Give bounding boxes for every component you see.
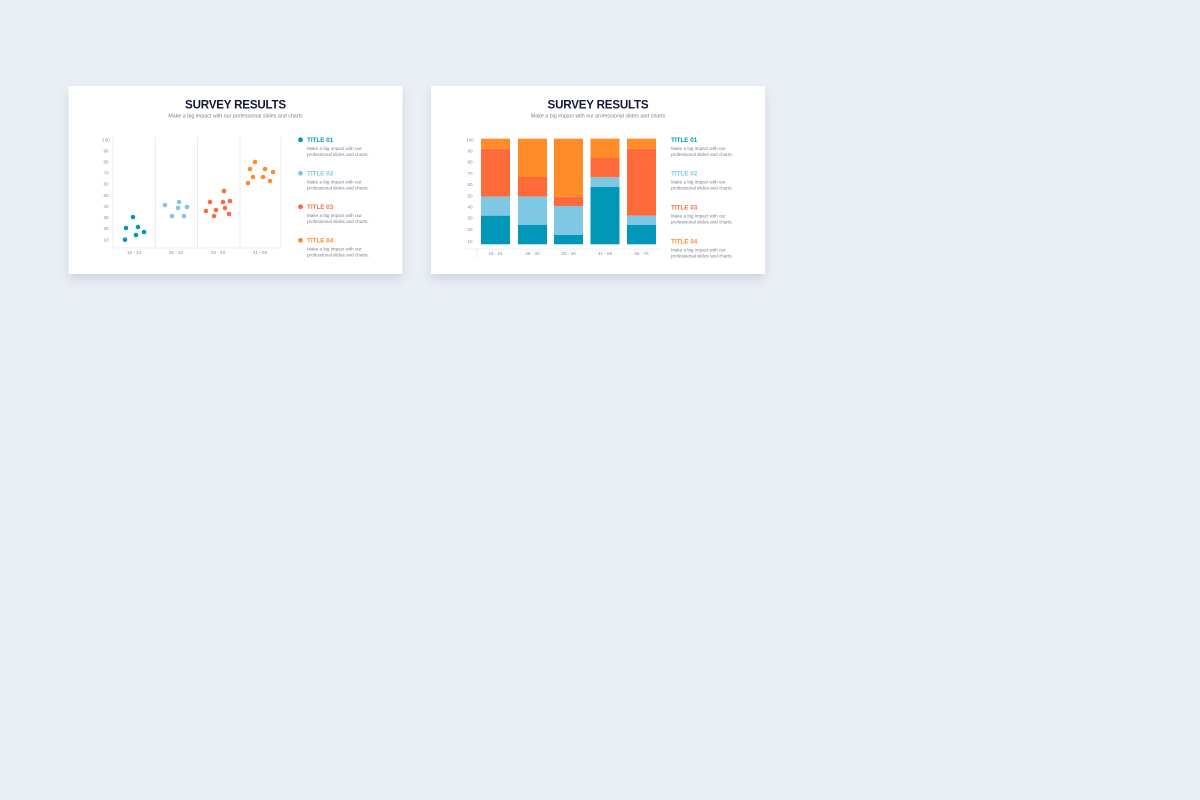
legend: scatter: Make a big impact with our (307, 213, 362, 218)
subtitle: Make a big impact with our professional slides and charts (531, 114, 665, 120)
legend: bars: TITLE 02 (671, 170, 698, 178)
legend: scatter: professional slides and charts. (307, 152, 369, 157)
scatter chart: 70 (103, 170, 109, 176)
legend: bars: TITLE 03 (671, 204, 698, 212)
stacked bar chart: 25 - 32 (525, 251, 540, 256)
legend: bars: Make a big impact with our (671, 214, 726, 218)
scatter chart: 90 (103, 148, 109, 154)
scatter chart: 40 (103, 204, 109, 209)
stacked bar chart: 90 (467, 148, 473, 154)
legend: scatter: TITLE 01 (307, 137, 334, 144)
panel: scatter card (68, 86, 402, 274)
scatter chart (102, 137, 281, 255)
legend: scatter: professional slides and charts. (307, 186, 369, 190)
legend: scatter: TITLE 03 (307, 204, 334, 211)
panel: stacked bar card (431, 86, 765, 274)
legend: bars: professional slides and charts. (671, 186, 733, 190)
title: SURVEY RESULTS (185, 98, 286, 112)
subtitle: Make a big impact with our professional slides and charts (168, 114, 303, 120)
stacked bar chart: 60 (467, 182, 473, 187)
stacked bar chart: 10 (467, 239, 473, 244)
scatter chart: 25 - 32 (169, 250, 184, 255)
legend: scatter: Make a big impact with our (307, 246, 362, 252)
scatter chart: 41 - 55 (253, 250, 268, 255)
stacked bar chart: 41 - 55 (598, 251, 613, 256)
legend: bars: Make a big impact with our (671, 248, 726, 252)
legend: bars (671, 137, 733, 258)
legend: bars: professional slides and charts. (671, 152, 733, 157)
stacked bar chart: 20 (467, 227, 473, 232)
legend: bars: TITLE 04 (671, 238, 698, 246)
scatter chart: 80 (103, 160, 109, 164)
scatter chart: 20 (103, 226, 109, 231)
stacked bar chart: 18 - 24 (488, 251, 503, 256)
legend: bars: professional slides and charts. (671, 220, 733, 224)
legend: bars: Make a big impact with our (671, 180, 726, 184)
stacked bar chart: 50 (467, 194, 473, 198)
stacked bar chart: 70 (467, 171, 473, 176)
legend: scatter: TITLE 04 (307, 238, 334, 244)
scatter chart: 18 - 24 (127, 250, 142, 255)
legend: scatter: TITLE 02 (307, 170, 334, 178)
scatter chart: 10 (103, 238, 109, 242)
legend: scatter: professional slides and charts. (307, 219, 369, 224)
title: SURVEY RESULTS (548, 98, 649, 112)
scatter chart: 30 (103, 215, 109, 220)
scatter chart: 60 (103, 182, 109, 186)
stacked bar chart: 33 - 40 (561, 251, 576, 256)
stacked bar chart: 30 (467, 216, 473, 220)
legend: bars: professional slides and charts. (671, 254, 733, 258)
stacked bar chart: 56 - 75 (634, 251, 649, 256)
legend: scatter: Make a big impact with our (307, 180, 362, 184)
legend: scatter: professional slides and charts. (307, 252, 369, 258)
scatter chart: 100 (102, 138, 110, 142)
legend: scatter: Make a big impact with our (307, 146, 362, 151)
stacked bar chart (465, 138, 660, 258)
stacked bar chart: 40 (467, 204, 473, 210)
scatter chart: 50 (103, 193, 109, 198)
legend: scatter (298, 137, 369, 258)
stacked bar chart: 80 (467, 160, 473, 164)
legend: bars: Make a big impact with our (671, 146, 726, 151)
scatter chart: 33 - 40 (211, 250, 226, 255)
stacked bar chart: 100 (466, 138, 474, 142)
legend: bars: TITLE 01 (671, 137, 698, 144)
